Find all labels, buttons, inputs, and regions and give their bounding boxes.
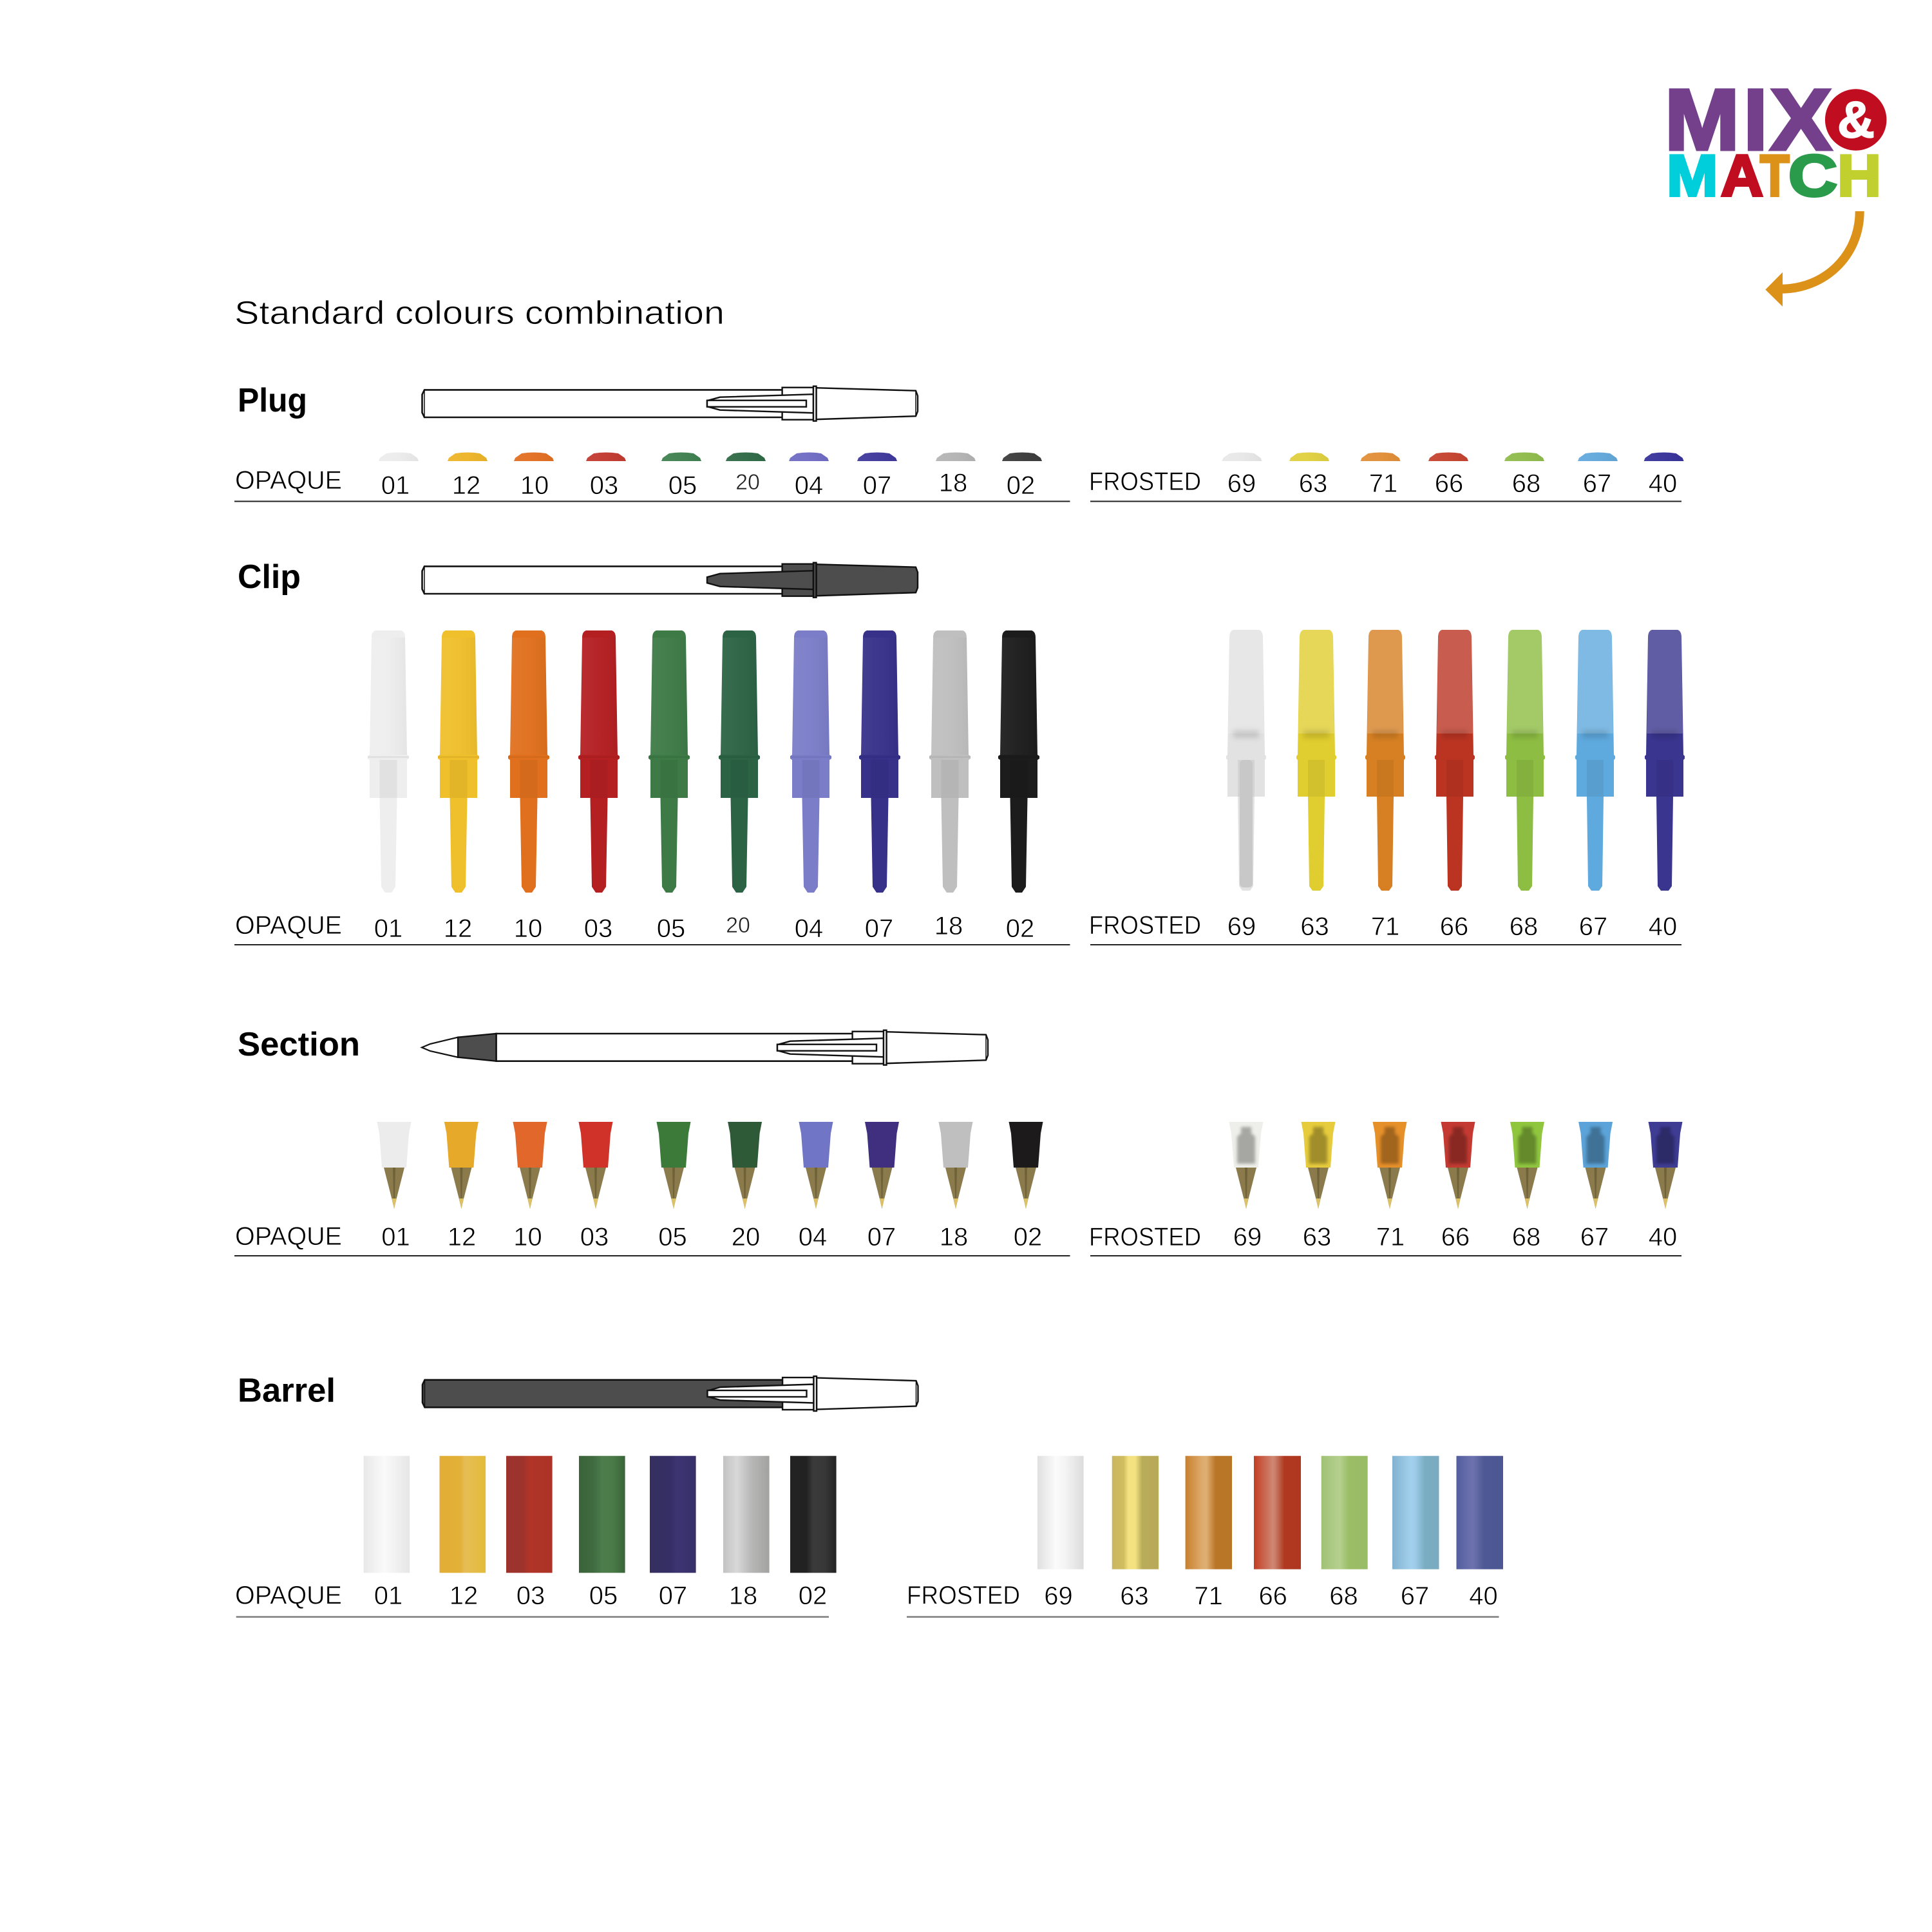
panel: section bbox=[234, 1026, 1682, 1256]
frosted clip labels: 68 bbox=[1510, 913, 1538, 941]
opaque plug labels: 07 bbox=[863, 471, 891, 500]
frosted section labels: FROSTED bbox=[1089, 1223, 1201, 1251]
opaque clip labels: 04 bbox=[795, 914, 823, 943]
opaque section labels: OPAQUE bbox=[235, 1222, 342, 1251]
opaque plug labels: 03 bbox=[590, 471, 618, 500]
opaque section parts bbox=[377, 1122, 1043, 1209]
opaque barrel labels: 05 bbox=[589, 1582, 618, 1610]
opaque plug labels bbox=[235, 466, 1035, 500]
frosted plug swatches bbox=[1222, 452, 1684, 461]
logo word: MATCH: T bbox=[1760, 144, 1790, 209]
frosted plug labels bbox=[1089, 468, 1677, 498]
heading: Plug: Plug bbox=[238, 382, 307, 419]
opaque clip labels: 07 bbox=[865, 914, 893, 943]
frosted clip labels: FROSTED bbox=[1089, 911, 1201, 940]
opaque clip labels: 12 bbox=[444, 914, 472, 943]
frosted plug labels: 71 bbox=[1369, 469, 1397, 498]
frosted plug labels: 68 bbox=[1512, 469, 1540, 498]
logo word: MATCH bbox=[1667, 144, 1881, 209]
frosted section labels: 40 bbox=[1649, 1223, 1677, 1251]
frosted clip labels: 66 bbox=[1440, 913, 1468, 941]
opaque plug labels: OPAQUE bbox=[235, 466, 342, 495]
opaque section labels: 07 bbox=[867, 1223, 896, 1251]
opaque barrel labels: 01 bbox=[374, 1582, 402, 1610]
panel: barrel bbox=[235, 1372, 1503, 1617]
logo word: MIX: X bbox=[1770, 72, 1832, 168]
opaque plug labels: 18 bbox=[939, 469, 967, 497]
logo word: MATCH: H bbox=[1837, 144, 1881, 209]
frosted barrel labels bbox=[907, 1582, 1498, 1610]
frosted clip labels: 67 bbox=[1579, 913, 1607, 941]
opaque barrel labels: OPAQUE bbox=[235, 1582, 342, 1610]
opaque barrel labels: 03 bbox=[516, 1582, 545, 1610]
opaque clip labels: 02 bbox=[1006, 914, 1034, 943]
frosted section labels bbox=[1089, 1223, 1677, 1251]
frosted section parts bbox=[1229, 1122, 1682, 1209]
logo word: MIX: M bbox=[1665, 72, 1739, 168]
opaque section labels: 05 bbox=[658, 1223, 687, 1251]
frosted barrel labels: FROSTED bbox=[907, 1582, 1020, 1610]
opaque barrel labels: 02 bbox=[799, 1582, 827, 1610]
opaque clip labels: 01 bbox=[374, 914, 402, 943]
frosted barrel labels: 63 bbox=[1120, 1582, 1149, 1610]
frosted clip labels: 69 bbox=[1227, 913, 1256, 941]
opaque clip labels bbox=[235, 911, 1034, 943]
frosted section labels: 71 bbox=[1376, 1223, 1405, 1251]
frosted section labels: 63 bbox=[1303, 1223, 1331, 1251]
frosted section labels: 67 bbox=[1580, 1223, 1609, 1251]
frosted barrel labels: 67 bbox=[1401, 1582, 1429, 1610]
frosted clip labels: 63 bbox=[1300, 913, 1329, 941]
logo word: MIX bbox=[1665, 72, 1832, 168]
logo word: MATCH: C bbox=[1788, 144, 1837, 209]
heading: Barrel: Barrel bbox=[238, 1372, 336, 1410]
logo word: MATCH: A bbox=[1721, 144, 1763, 209]
opaque section labels bbox=[235, 1222, 1042, 1251]
arrow: curved orange pointer bbox=[1765, 211, 1860, 307]
heading: Section: Section bbox=[238, 1026, 360, 1063]
panel: clip bbox=[234, 558, 1685, 945]
opaque clip labels: 03 bbox=[584, 914, 612, 943]
frosted clip labels bbox=[1089, 911, 1677, 941]
frosted barrel labels: 71 bbox=[1194, 1582, 1223, 1610]
frosted plug labels: 63 bbox=[1299, 469, 1327, 498]
opaque section labels: 10 bbox=[513, 1223, 542, 1251]
opaque barrel labels: 07 bbox=[659, 1582, 687, 1610]
frosted plug labels: 66 bbox=[1435, 469, 1463, 498]
heading: Clip: Clip bbox=[238, 558, 301, 596]
opaque plug labels: 05 bbox=[668, 471, 697, 500]
frosted clips bbox=[1226, 630, 1685, 891]
opaque barrel labels: 12 bbox=[450, 1582, 478, 1610]
panel: plug bbox=[234, 382, 1684, 501]
logo badge: ampersand bbox=[1824, 89, 1887, 151]
opaque barrel labels bbox=[235, 1582, 827, 1610]
frosted section labels: 66 bbox=[1441, 1223, 1470, 1251]
opaque clip labels: OPAQUE bbox=[235, 911, 342, 940]
opaque clip labels: 18 bbox=[934, 912, 963, 940]
opaque plug labels: 02 bbox=[1007, 471, 1035, 500]
title: Standard colours combination bbox=[234, 294, 724, 331]
logo word: MIX: I bbox=[1744, 72, 1767, 168]
pen diagram: plug bbox=[422, 386, 918, 421]
opaque plug labels: 10 bbox=[520, 471, 549, 500]
pen diagram: clip bbox=[422, 563, 918, 598]
frosted barrel labels: 69 bbox=[1044, 1582, 1073, 1610]
frosted plug labels: FROSTED bbox=[1089, 468, 1201, 496]
opaque section labels: 12 bbox=[448, 1223, 476, 1251]
frosted barrel labels: 68 bbox=[1329, 1582, 1358, 1610]
frosted barrel labels: 40 bbox=[1469, 1582, 1498, 1610]
opaque plug labels: 04 bbox=[795, 471, 823, 500]
opaque plug labels: 20 bbox=[735, 470, 760, 495]
frosted section labels: 68 bbox=[1512, 1223, 1540, 1251]
opaque barrel labels: 18 bbox=[729, 1582, 757, 1610]
frosted plug labels: 40 bbox=[1649, 469, 1677, 498]
frosted clip labels: 71 bbox=[1371, 913, 1399, 941]
opaque section labels: 01 bbox=[381, 1223, 410, 1251]
pen diagram: section bbox=[422, 1030, 988, 1065]
opaque section labels: 02 bbox=[1014, 1223, 1042, 1251]
opaque plug swatches bbox=[379, 452, 1042, 461]
pen diagram: barrel bbox=[422, 1376, 918, 1411]
frosted barrel swatches bbox=[1037, 1456, 1503, 1569]
frosted section labels: 69 bbox=[1233, 1223, 1262, 1251]
opaque clip labels: 05 bbox=[657, 914, 685, 943]
opaque clip labels: 20 bbox=[726, 913, 750, 938]
opaque section labels: 18 bbox=[940, 1223, 968, 1251]
opaque plug labels: 12 bbox=[452, 471, 480, 500]
frosted clip labels: 40 bbox=[1649, 913, 1677, 941]
opaque plug labels: 01 bbox=[381, 471, 410, 500]
opaque section labels: 04 bbox=[799, 1223, 827, 1251]
frosted plug labels: 69 bbox=[1227, 469, 1256, 498]
logo badge: ampersand: & bbox=[1837, 91, 1875, 148]
logo word: MATCH: M bbox=[1667, 144, 1718, 209]
opaque section labels: 03 bbox=[580, 1223, 609, 1251]
opaque section labels: 20 bbox=[732, 1223, 760, 1251]
opaque clip labels: 10 bbox=[514, 914, 542, 943]
frosted barrel labels: 66 bbox=[1258, 1582, 1287, 1610]
opaque clips bbox=[368, 630, 1039, 893]
frosted plug labels: 67 bbox=[1583, 469, 1611, 498]
logo: Mix & Match bbox=[1665, 72, 1887, 209]
opaque barrel swatches bbox=[364, 1456, 837, 1573]
